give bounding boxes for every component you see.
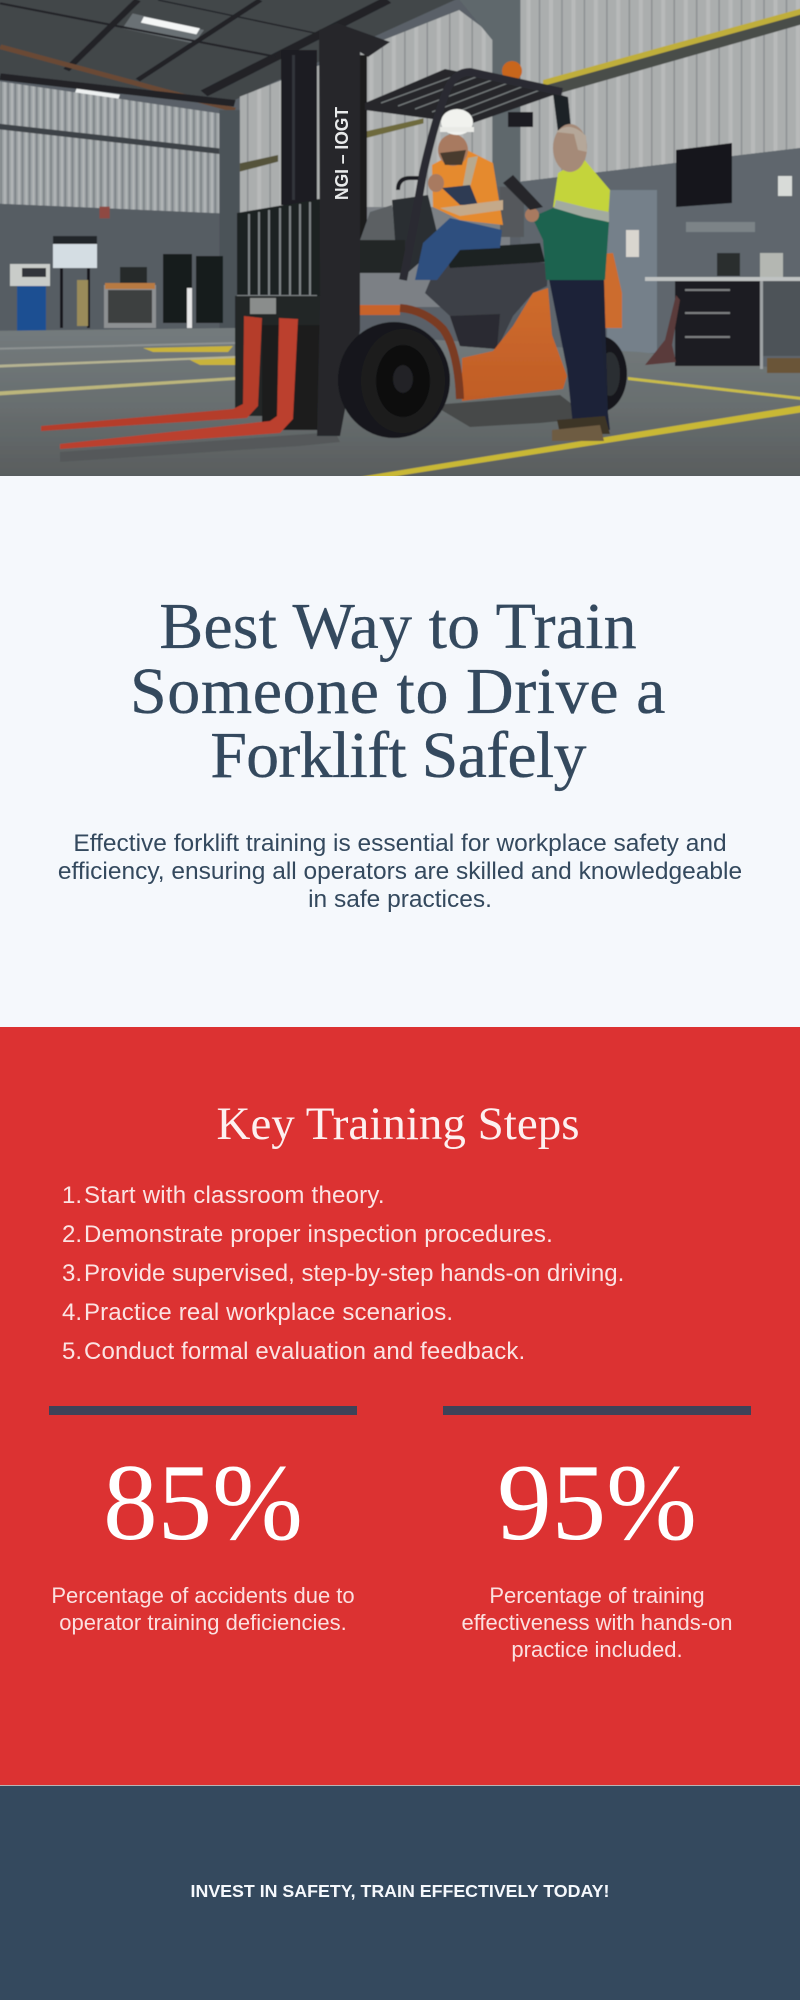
- intro paragraph: efficiency, ensuring all operators are skilled and knowledgeable: [58, 858, 742, 884]
- dash and cab: [360, 205, 395, 240]
- panel: key training steps: [0, 1027, 800, 1785]
- title: Best Way to Train: [159, 590, 637, 663]
- stat bar: [443, 1406, 751, 1415]
- tablet: [503, 175, 543, 210]
- stat bar: [49, 1406, 357, 1415]
- left corrugated wall: [0, 80, 219, 213]
- numbered steps list: Practice real workplace scenarios.: [84, 1299, 453, 1326]
- stat card: 95%: [443, 1406, 751, 1662]
- guard: [365, 69, 562, 123]
- numbered steps list: 1.: [62, 1182, 82, 1209]
- intro paragraph: in safe practices.: [308, 886, 492, 912]
- numbered steps list: 5.: [62, 1338, 82, 1365]
- stat label: operator training deficiencies.: [59, 1610, 347, 1634]
- intro paragraph: Effective forklift training is essential for workplace safety and: [73, 830, 727, 856]
- door and right wall items: [607, 190, 657, 353]
- driver: [415, 218, 502, 280]
- title: Forklift Safely: [210, 719, 586, 792]
- stat label: effectiveness with hands-on: [461, 1610, 733, 1634]
- numbered steps list: Demonstrate proper inspection procedures.: [84, 1221, 553, 1248]
- shadows: [60, 432, 340, 462]
- numbered steps list: Start with classroom theory.: [84, 1182, 385, 1209]
- tractor body: [425, 259, 548, 349]
- stat label: Percentage of training: [489, 1582, 705, 1608]
- main mast: [317, 23, 390, 436]
- fender: [360, 305, 400, 315]
- rear mast: [281, 50, 317, 205]
- forks: [41, 316, 262, 431]
- stat card: 85%: [49, 1406, 357, 1634]
- title: Someone to Drive a: [130, 654, 666, 728]
- stat label: practice included.: [511, 1636, 683, 1662]
- ceiling: [0, 0, 469, 100]
- stat value: 85%: [103, 1442, 303, 1563]
- mast lettering: NGI – IOGT: [332, 107, 352, 200]
- front wheel: [338, 322, 450, 438]
- numbered steps list: Provide supervised, step-by-step hands-on driving.: [84, 1260, 624, 1287]
- right desk: [675, 281, 760, 366]
- beacon: [502, 61, 522, 81]
- orange body: [462, 288, 567, 401]
- section heading: Key Training Steps: [216, 1098, 580, 1150]
- footer slogan: INVEST IN SAFETY, TRAIN EFFECTIVELY TODAY!: [191, 1881, 609, 1901]
- carriage: [235, 296, 339, 416]
- seat back: [500, 187, 524, 237]
- wall base: [0, 0, 800, 486]
- panel: intro: [0, 476, 800, 1027]
- left equipment: [53, 236, 97, 244]
- numbered steps list: 3.: [62, 1260, 82, 1287]
- intro paragraph: [58, 830, 742, 912]
- right corrugated wall: [520, 0, 800, 182]
- numbered steps list: 4.: [62, 1299, 82, 1326]
- floor: [0, 328, 800, 486]
- numbered steps list: [62, 1182, 624, 1365]
- stat label: [461, 1582, 733, 1662]
- numbered steps list: 2.: [62, 1221, 82, 1248]
- hero photo: forklift training scene: [0, 0, 800, 476]
- steering handle: [398, 178, 425, 190]
- front pillar: [403, 72, 562, 280]
- instructor: [575, 279, 610, 430]
- stat label: Percentage of accidents due to: [51, 1582, 355, 1608]
- title: [130, 590, 666, 792]
- stat value: 95%: [497, 1442, 697, 1563]
- high stripe right: [543, 8, 800, 98]
- centre corrugated wall: [240, 10, 495, 213]
- rear wheel: [573, 336, 627, 412]
- backrest: [237, 199, 333, 300]
- panel: footer call to action: [0, 1785, 800, 2000]
- lower centre wall: [360, 207, 510, 307]
- numbered steps list: Conduct formal evaluation and feedback.: [84, 1338, 525, 1365]
- stat label: [51, 1582, 355, 1634]
